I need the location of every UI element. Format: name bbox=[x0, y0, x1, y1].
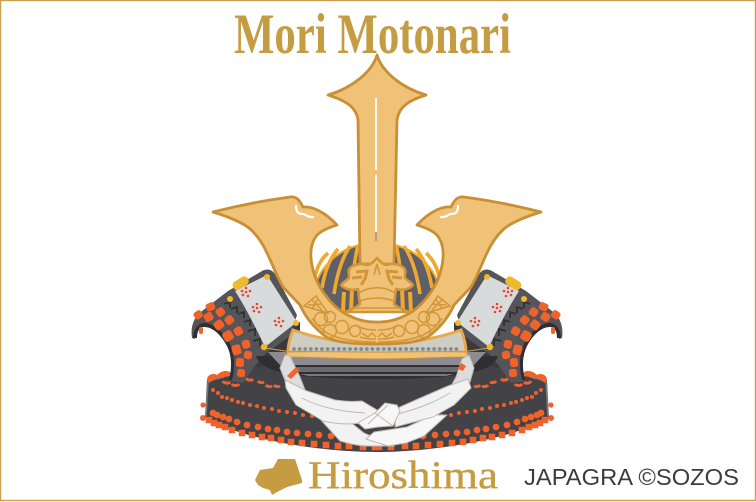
white cord knot bbox=[280, 355, 474, 446]
right side flap (fukigaeshi) bbox=[454, 270, 562, 383]
Hiroshima label: Hiroshima bbox=[308, 454, 498, 497]
left side flap (fukigaeshi) bbox=[192, 270, 300, 383]
crest crown ornament bbox=[341, 258, 413, 312]
neck guard (shikoro) with orange lacing bbox=[200, 358, 554, 452]
brim layers bbox=[256, 352, 498, 379]
central sword crest bbox=[328, 55, 426, 264]
credit: JAPAGRA ©SOZOS bbox=[524, 464, 739, 490]
highlight curls bbox=[296, 206, 458, 217]
Hiroshima prefecture map icon bbox=[255, 459, 302, 495]
helmet dome with gold ribs bbox=[311, 243, 443, 312]
title: Mori Motonari bbox=[234, 3, 511, 66]
golden crescent crest (kuwagata) bbox=[213, 197, 541, 344]
brim plate with studs bbox=[286, 330, 468, 359]
helmet illustration bbox=[192, 55, 562, 452]
